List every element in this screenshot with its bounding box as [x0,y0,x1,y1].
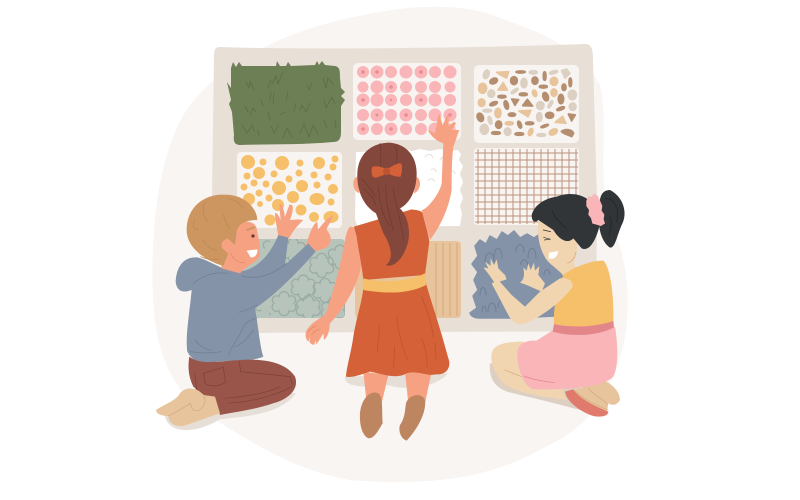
girl belt [553,321,614,335]
girl shadow [345,373,448,388]
girl foot and shoe [565,382,620,417]
background blob [152,7,628,482]
panel: pebbles [474,65,579,143]
girl hair [532,190,625,249]
panel: grass [227,61,345,145]
boy shadow [165,387,296,430]
girl belt [363,273,426,293]
girl hair [357,143,417,266]
panel: wood slats [355,241,461,318]
girl left arm [306,227,362,345]
board frame [212,44,597,333]
girl skirt [517,327,617,389]
girl dress [346,209,449,377]
panel: woven grid [474,148,579,225]
boy feet [156,389,220,426]
boy pants [189,357,296,415]
panel: teal cobbles [242,239,345,318]
boy hoodie [176,235,316,364]
girl in pink skirt [483,190,625,417]
girl ears [353,177,420,193]
panel: pink dots [353,63,461,140]
panel: blue shag [470,231,569,318]
girl shoes [360,392,425,441]
girl shadow [490,363,603,417]
girl in orange dress [306,114,459,441]
girl top [554,261,613,327]
girl scrunchie [587,194,605,226]
girl arms and hands [483,258,573,324]
sensory board [212,44,597,333]
boy head [187,195,260,273]
panel: white fluffy [355,149,463,227]
girl legs [363,372,432,403]
girl raised arm [422,114,459,240]
boy [156,195,333,430]
girl legs [491,342,567,400]
panel: yellow dots [237,152,342,228]
girl hair bow [372,163,402,178]
illustration: children at a sensory wall [152,7,628,482]
girl head [538,219,582,280]
boy near hand and far hand [275,204,333,252]
